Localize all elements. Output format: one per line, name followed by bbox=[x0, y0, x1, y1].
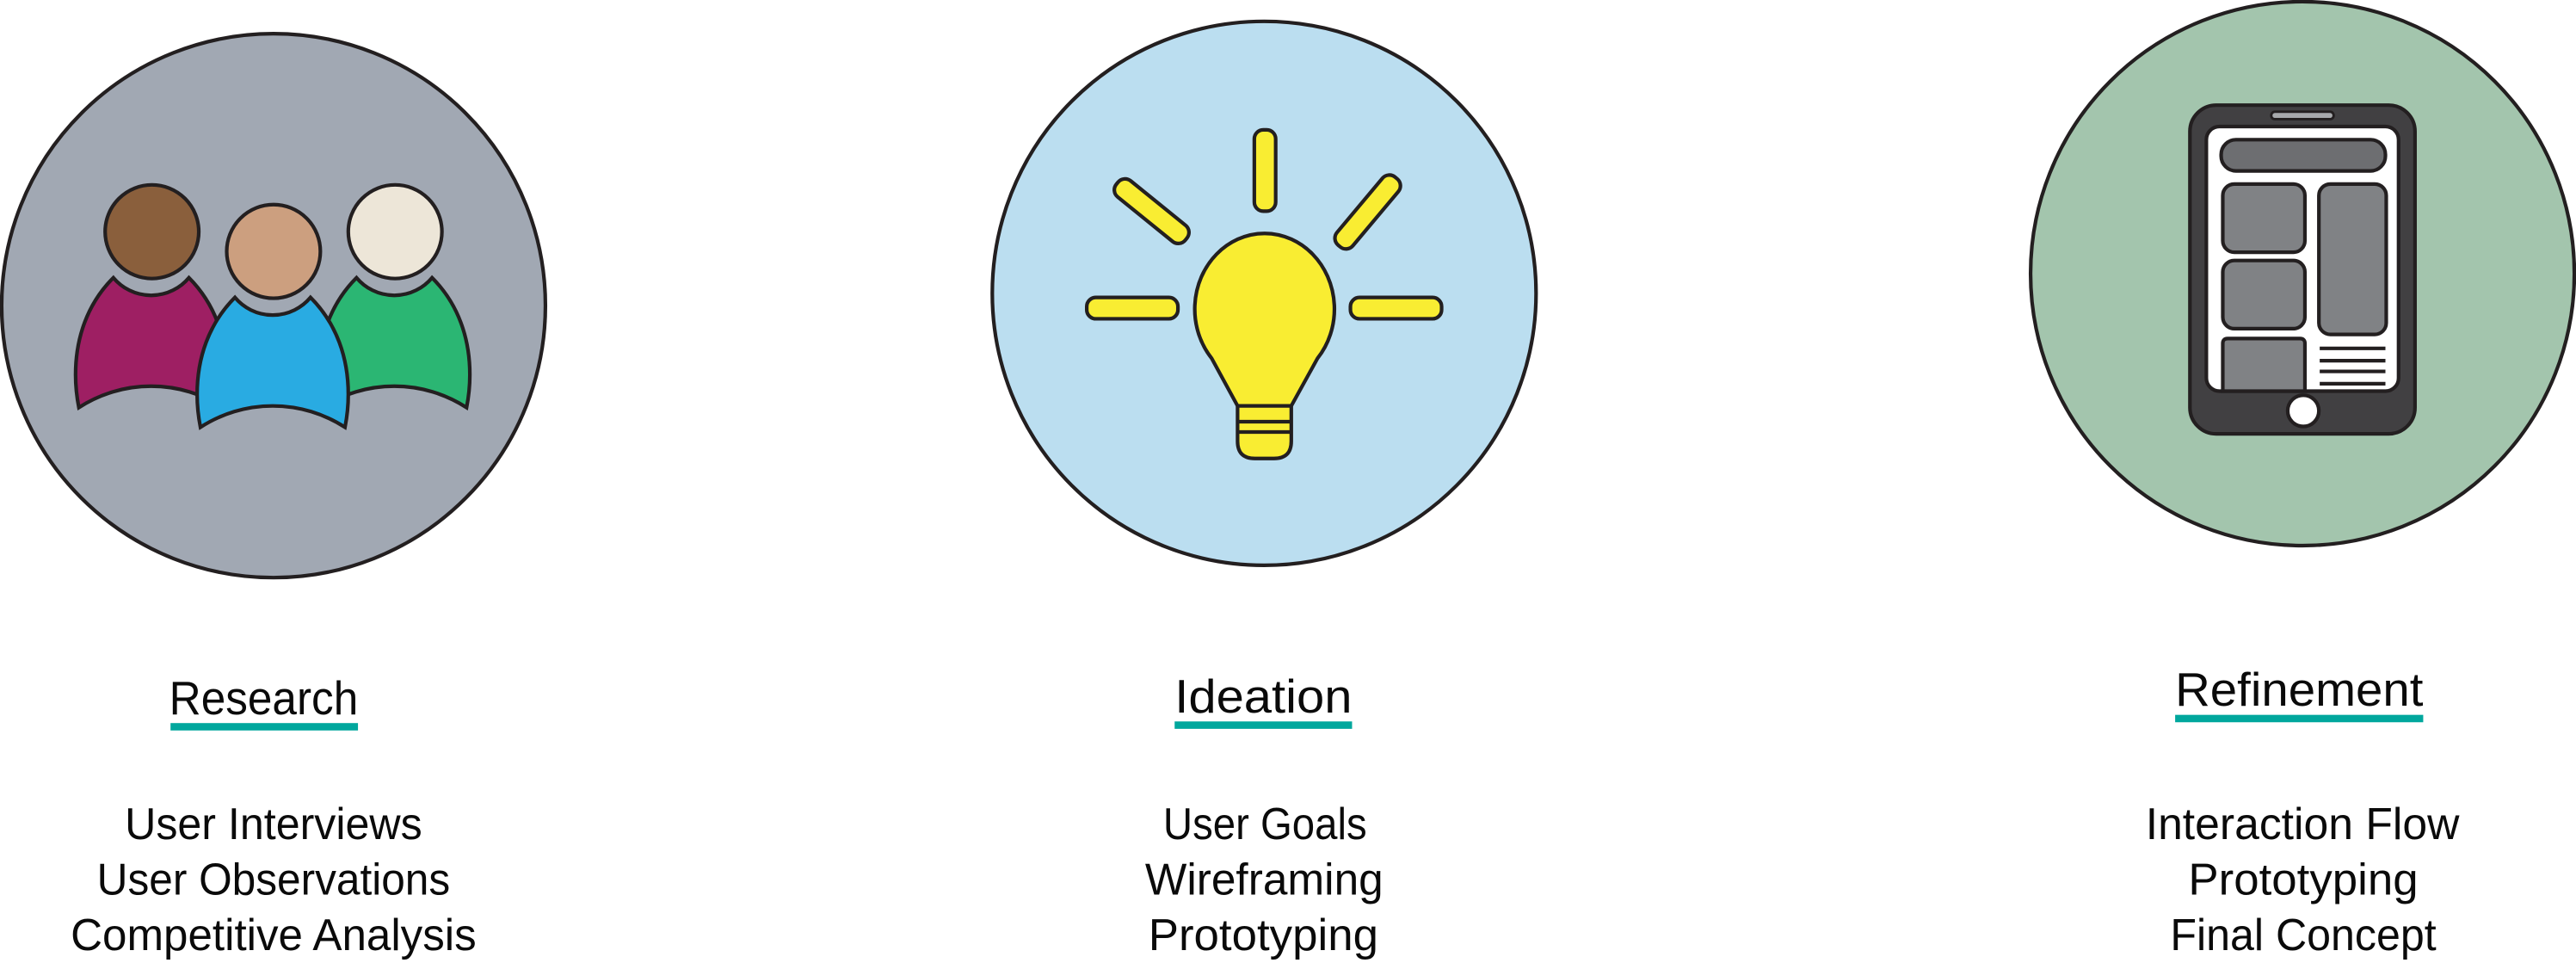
panel: refinement bbox=[2031, 2, 2574, 960]
heading: ideation: Ideation bbox=[1174, 670, 1352, 723]
icon: research circle bbox=[2, 34, 545, 577]
panel: ideation bbox=[992, 22, 1536, 960]
text block: ideation activities: Prototyping bbox=[1149, 910, 1378, 960]
text block: research activities: Competitive Analysis bbox=[71, 910, 477, 960]
wireframe header bar bbox=[2222, 139, 2386, 171]
text block: ideation activities: Wireframing bbox=[1145, 854, 1384, 904]
text block: ideation activities bbox=[1145, 799, 1384, 960]
icon: right user bbox=[318, 185, 470, 408]
heading underline: refinement bbox=[2175, 715, 2423, 722]
text block: ideation activities: User Goals bbox=[1163, 799, 1367, 849]
wireframe card 3 bbox=[2222, 338, 2305, 391]
text block: research activities: User Interviews bbox=[125, 799, 422, 849]
icon: ideation circle bbox=[992, 22, 1536, 565]
icon: bulb glass bbox=[1195, 233, 1334, 406]
tablet home button bbox=[2288, 395, 2319, 427]
heading underline: ideation bbox=[1174, 721, 1352, 729]
heading: refinement: Refinement bbox=[2175, 663, 2423, 716]
text block: research activities bbox=[71, 799, 477, 960]
icon: bulb rays bbox=[1087, 130, 1442, 318]
icon: bulb base bbox=[1237, 406, 1291, 459]
tablet body bbox=[2190, 105, 2415, 434]
text block: refinement activities bbox=[2146, 799, 2460, 960]
panel: research bbox=[2, 34, 545, 960]
icon: tablet bbox=[2190, 105, 2415, 434]
icon: light bulb bbox=[1087, 130, 1442, 459]
wireframe card 2 bbox=[2222, 261, 2305, 329]
heading underline: research bbox=[170, 723, 358, 731]
wireframe tall card bbox=[2319, 184, 2386, 335]
icon: left user bbox=[76, 185, 227, 408]
icon: centre user bbox=[197, 205, 348, 427]
text block: refinement activities: Final Concept bbox=[2170, 910, 2437, 960]
tablet speaker bbox=[2271, 112, 2333, 119]
bulb base threads bbox=[1237, 422, 1291, 432]
wireframe text lines bbox=[2320, 349, 2386, 384]
icon: refinement circle bbox=[2031, 2, 2574, 546]
heading: research: Research bbox=[169, 671, 358, 725]
text block: refinement activities: Prototyping bbox=[2188, 854, 2419, 904]
text block: research activities: User Observations bbox=[97, 854, 450, 904]
wireframe card 1 bbox=[2222, 184, 2305, 252]
icon: three users bbox=[76, 185, 470, 427]
tablet screen bbox=[2206, 127, 2399, 391]
text block: refinement activities: Interaction Flow bbox=[2146, 799, 2460, 849]
